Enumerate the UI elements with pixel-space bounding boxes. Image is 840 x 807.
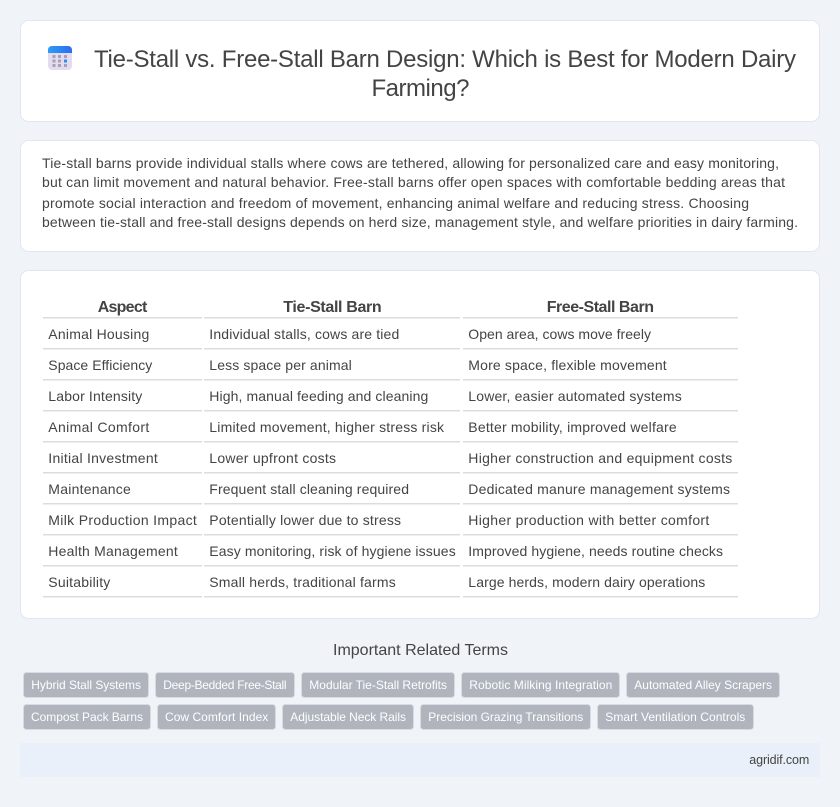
row: initial investment [48,450,732,466]
tag [462,672,620,698]
column headers [98,299,654,316]
row: milk production impact: Higher production with better comfort [468,512,709,528]
tag: Hybrid Stall Systems [31,678,141,692]
row: health management: Easy monitoring, risk of hygiene issues [209,543,456,559]
tag [598,704,754,730]
row: suitability: Suitability [48,574,110,590]
row: suitability: Small herds, traditional farms [209,574,396,590]
row: labor intensity [48,388,682,404]
column headers: Free-Stall Barn [547,299,654,316]
intro paragraph: but can limit movement and natural behavior. Free-stall barns offer open spaces with comfortable bedding areas that [42,174,785,190]
title: Farming? [372,75,470,102]
tag [158,704,276,730]
row: maintenance: Frequent stall cleaning required [209,481,409,497]
header card [20,20,820,122]
tag [24,672,148,698]
related terms heading: Important Related Terms [333,642,508,659]
tag: Cow Comfort Index [165,710,268,724]
intro paragraph: Tie-stall barns provide individual stalls where cows are tethered, allowing for personalized care and easy monitoring, [42,155,779,171]
tag: Compost Pack Barns [31,710,143,724]
row: animal comfort: Animal Comfort [48,419,149,435]
footer bar [20,743,820,777]
title [94,46,796,102]
intro paragraph [42,155,798,230]
column headers: Tie-Stall Barn [283,299,382,316]
tag [420,704,590,730]
tag: Adjustable Neck Rails [290,710,406,724]
row: initial investment: Initial Investment [48,450,158,466]
row: initial investment: Higher construction and equipment costs [468,450,732,466]
row: labor intensity: Lower, easier automated systems [468,388,682,404]
intro text panel [20,140,820,252]
row: space efficiency: Space Efficiency [48,357,152,373]
tag: Robotic Milking Integration [469,678,612,692]
row: milk production impact: Milk Production Impact [48,512,197,528]
row: suitability: Large herds, modern dairy operations [468,574,705,590]
table rules [43,317,738,598]
row: maintenance: Maintenance [48,481,131,497]
tag: Modular Tie-Stall Retrofits [309,678,447,692]
row: animal housing: Individual stalls, cows are tied [209,326,399,342]
row: suitability [48,574,705,590]
row: animal comfort: Better mobility, improved welfare [468,419,677,435]
row: animal housing [48,326,651,342]
column headers: Aspect [98,299,148,316]
row: animal housing: Animal Housing [48,326,149,342]
row: labor intensity: Labor Intensity [48,388,142,404]
intro paragraph: between tie-stall and free-stall designs depends on herd size, management style, and welfare priorities in dairy farming. [42,214,798,230]
tag: Precision Grazing Transitions [428,710,583,724]
row: space efficiency [48,357,667,373]
tag [626,672,780,698]
tag: Automated Alley Scrapers [634,678,772,692]
footer source: agridif.com [749,753,809,767]
row: animal comfort: Limited movement, higher stress risk [209,419,445,435]
row: animal comfort [48,419,677,435]
row: initial investment: Lower upfront costs [209,450,336,466]
row: health management: Health Management [48,543,178,559]
row: maintenance [48,481,730,497]
row: space efficiency: More space, flexible movement [468,357,667,373]
tag [24,704,150,730]
row: maintenance: Dedicated manure management systems [468,481,730,497]
tag: Deep-Bedded Free-Stall [163,678,287,692]
row: labor intensity: High, manual feeding and cleaning [209,388,428,404]
icon: calendar [48,46,72,70]
row: milk production impact [48,512,709,528]
comparison table panel [20,270,820,618]
intro paragraph: promote social interaction and freedom of movement, enhancing animal welfare and reducing stress. Choosing [42,195,749,211]
tag: Smart Ventilation Controls [605,710,745,724]
row: health management: Improved hygiene, needs routine checks [468,543,723,559]
row: space efficiency: Less space per animal [209,357,352,373]
tag [156,672,294,698]
tag [282,704,414,730]
title: Tie-Stall vs. Free-Stall Barn Design: Which is Best for Modern Dairy [94,46,796,73]
related terms tags [24,672,780,730]
row: animal housing: Open area, cows move freely [468,326,651,342]
row: milk production impact: Potentially lower due to stress [209,512,401,528]
row: health management [48,543,723,559]
tag [302,672,454,698]
